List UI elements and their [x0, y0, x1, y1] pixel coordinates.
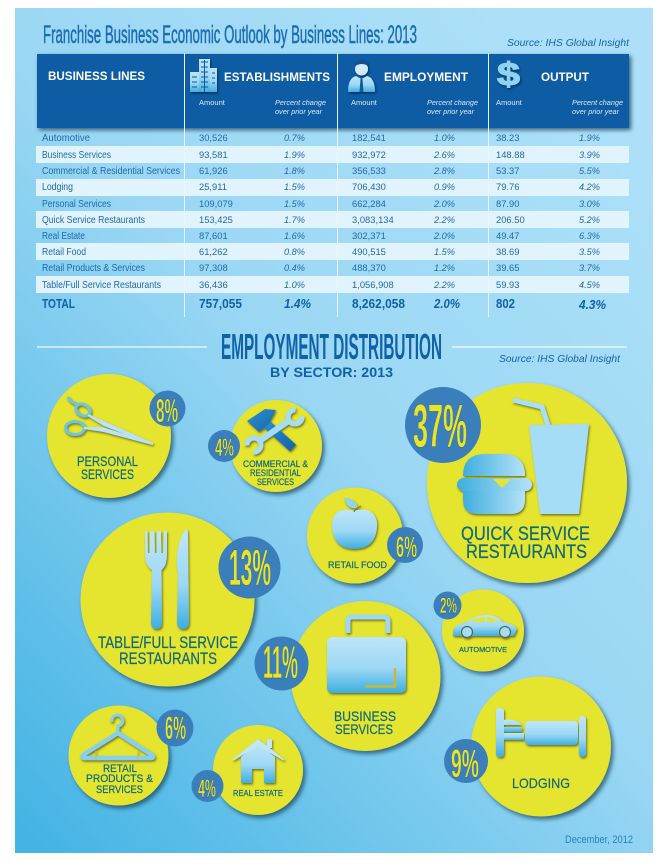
row: automotive: 1.9% — [579, 133, 600, 143]
icon: fork — [145, 531, 167, 629]
bubble: automotive 2% — [434, 590, 524, 672]
row: personal services: Personal Services — [42, 199, 111, 210]
header label: output: OUTPUT — [541, 70, 590, 84]
row: retail products and services: 97,308 — [199, 262, 228, 273]
row: business services: 93,581 — [199, 149, 228, 160]
row: table/full service restaurants: Table/Full Service Restaurants — [42, 280, 161, 291]
row: lodging: 79.76 — [496, 181, 519, 192]
row: real estate: 1.6% — [284, 231, 305, 241]
label: SERVICES — [96, 784, 143, 796]
row: lodging — [42, 181, 600, 193]
bubble: personal services 8% — [47, 374, 186, 498]
row: automotive — [42, 132, 600, 144]
icon: knife — [177, 529, 189, 629]
percent badge: 4% — [215, 434, 234, 462]
row: retail food: 0.8% — [284, 247, 305, 257]
row: table/full service restaurants: 4.5% — [579, 280, 600, 290]
row: retail food: 1.5% — [434, 247, 455, 257]
row: lodging: Lodging — [42, 182, 73, 193]
header sublabels: output: over prior year — [572, 107, 619, 116]
row: business services: 932,972 — [352, 149, 386, 160]
percent badge: 2% — [440, 593, 457, 618]
icon: car — [453, 615, 517, 638]
section subheading: by sector: BY SECTOR: 2013 — [270, 364, 393, 380]
header sublabels: employment — [351, 98, 478, 116]
header sublabels: establishments: Percent change — [275, 98, 326, 107]
row: retail food: 61,262 — [199, 246, 228, 257]
row: automotive: 30,526 — [199, 132, 228, 143]
icon: buildings — [190, 59, 217, 92]
label: RESTAURANTS — [119, 650, 217, 668]
label: RESIDENTIAL — [250, 468, 301, 478]
label: SERVICES — [335, 721, 393, 737]
header sublabels: output — [496, 98, 623, 116]
header label: employment: EMPLOYMENT — [384, 70, 469, 84]
label — [86, 763, 154, 796]
percent badge: 13% — [229, 539, 271, 596]
label: QUICK SERVICE — [461, 523, 590, 545]
row: business services: 1.9% — [284, 150, 305, 160]
percent badge — [254, 636, 308, 690]
row: personal services: 662,284 — [352, 198, 386, 209]
row: table/full service restaurants: 59.93 — [496, 279, 519, 290]
row: retail food: Retail Food — [42, 247, 86, 258]
header label: establishments: ESTABLISHMENTS — [224, 70, 330, 84]
percent badge — [218, 536, 280, 598]
label: RESTAURANTS — [466, 541, 587, 563]
header label: business lines: BUSINESS LINES — [48, 69, 145, 83]
label: TABLE/FULL SERVICE — [98, 634, 238, 652]
bubble: quick service restaurants 37% — [405, 383, 627, 583]
row: business services — [42, 149, 600, 161]
bubble: retail food 6% — [307, 488, 423, 584]
row: commercial and residential services: 1.8% — [284, 166, 305, 176]
row: retail food: 3.5% — [579, 247, 600, 257]
row: business services: 148.88 — [496, 149, 525, 160]
row: personal services: 2.0% — [433, 199, 455, 209]
percent badge: 4% — [198, 775, 216, 803]
row: lodging: 1.5% — [284, 182, 305, 192]
row: retail products and services: 39.65 — [496, 262, 519, 273]
icon: briefcase — [327, 617, 406, 693]
percent badge — [444, 739, 488, 786]
label — [334, 708, 396, 737]
icon: dollar sign: $ — [497, 56, 520, 92]
row: business services: 3.9% — [579, 150, 600, 160]
label: SERVICES — [81, 466, 134, 482]
row: automotive: Automotive — [42, 133, 90, 144]
row: personal services: 1.5% — [284, 199, 305, 209]
source note: distribution: Source: IHS Global Insight — [499, 353, 621, 365]
row: total: 8,262,058 — [352, 297, 405, 311]
header sublabels: output: Percent change — [572, 98, 623, 107]
row: real estate: Real Estate — [42, 231, 85, 242]
row: automotive: 1.0% — [434, 133, 455, 143]
row: quick service restaurants: 3,083,134 — [352, 214, 394, 225]
row: total: TOTAL — [42, 297, 75, 311]
date note: December, 2012 — [565, 834, 633, 846]
row: retail food: 490,515 — [352, 246, 386, 257]
row: total: 757,055 — [199, 297, 242, 311]
row: personal services — [42, 198, 600, 210]
header sublabels: output: Amount — [496, 98, 523, 107]
bubble: table/full service restaurants 13% — [80, 512, 280, 686]
row: real estate: 6.3% — [579, 231, 600, 241]
row: automotive: 38.23 — [496, 132, 519, 143]
row: quick service restaurants: 5.2% — [579, 215, 600, 225]
icon: hammer and wrench — [247, 409, 302, 452]
label — [243, 459, 308, 487]
row: personal services: 3.0% — [579, 199, 600, 209]
percent badge: 6% — [396, 531, 417, 564]
label: LODGING — [512, 775, 570, 791]
icon: bed — [496, 708, 586, 757]
row: total: 2.0% — [433, 297, 460, 311]
percent badge: 37% — [413, 392, 467, 460]
row: total — [42, 297, 606, 312]
row: commercial and residential services: 61,926 — [199, 165, 228, 176]
percent badge: 8% — [156, 392, 178, 429]
bubble: lodging 9% — [444, 676, 611, 816]
bubble: retail products and services 6% — [68, 706, 194, 806]
row: total: 1.4% — [284, 297, 311, 311]
row: table/full service restaurants: 1,056,908 — [352, 279, 394, 290]
row: automotive: 182,541 — [352, 132, 386, 143]
icon: apple — [332, 498, 377, 549]
icon: drink cup — [513, 400, 589, 514]
row: lodging: 706,430 — [352, 181, 386, 192]
row: total: 802 — [496, 297, 515, 311]
row: quick service restaurants: 1.7% — [284, 215, 305, 225]
label — [77, 453, 138, 482]
row: table/full service restaurants: 36,436 — [199, 279, 228, 290]
row: quick service restaurants: 206.50 — [496, 214, 525, 225]
header sublabels: establishments — [199, 98, 326, 116]
row: lodging: 4.2% — [579, 182, 600, 192]
row: commercial and residential services — [42, 165, 600, 177]
table — [36, 53, 629, 317]
row: personal services: 109,079 — [199, 198, 233, 209]
label: REAL ESTATE — [233, 789, 283, 798]
row: commercial and residential services: 356,533 — [352, 165, 386, 176]
row: real estate — [42, 230, 600, 242]
label: RETAIL — [103, 763, 137, 775]
header sublabels: employment: Amount — [351, 98, 378, 107]
source note: table: Source: IHS Global Insight — [507, 37, 630, 49]
bubble: commercial and residential services 4% — [208, 400, 322, 492]
label: PRODUCTS & — [86, 773, 154, 785]
icon: house — [233, 739, 284, 783]
label — [461, 523, 590, 563]
percent badge: 6% — [165, 710, 186, 746]
row: real estate: 49.47 — [496, 230, 519, 241]
icon: scissors — [66, 397, 153, 444]
label: SERVICES — [257, 477, 294, 487]
row: quick service restaurants: 153,425 — [199, 214, 233, 225]
row: commercial and residential services: Commercial & Residential Services — [42, 166, 180, 177]
table header — [37, 54, 629, 128]
row: retail food — [42, 246, 600, 258]
bubble: real estate 4% — [192, 725, 303, 815]
row: retail products and services: 3.7% — [579, 263, 600, 273]
header sublabels: employment: Percent change — [427, 98, 478, 107]
row: quick service restaurants: 2.2% — [433, 215, 455, 225]
label: AUTOMOTIVE — [459, 647, 507, 654]
row: business services: Business Services — [42, 150, 111, 161]
row: business services: 2.6% — [433, 150, 455, 160]
icon: business person — [348, 60, 375, 92]
header sublabels: employment: over prior year — [427, 107, 474, 116]
row: commercial and residential services: 5.5% — [579, 166, 600, 176]
row: commercial and residential services: 53.37 — [496, 165, 519, 176]
row: real estate: 87,601 — [199, 230, 228, 241]
row: retail food: 38.69 — [496, 246, 519, 257]
row: real estate: 302,371 — [352, 230, 386, 241]
row: personal services: 87.90 — [496, 198, 519, 209]
row: total: 4.3% — [578, 298, 606, 312]
bubble: business services 11% — [254, 601, 440, 751]
percent badge: 9% — [451, 742, 479, 786]
icon: hanger — [82, 715, 153, 760]
label: PERSONAL — [77, 453, 138, 469]
row bands — [36, 146, 629, 293]
row: retail products and services: 488,370 — [352, 262, 386, 273]
header sublabels: establishments: over prior year — [275, 107, 322, 116]
row: quick service restaurants — [42, 214, 600, 226]
label: COMMERCIAL & — [243, 459, 308, 469]
percent badge — [405, 387, 481, 463]
row: lodging: 25,911 — [199, 181, 227, 192]
row: table/full service restaurants: 2.2% — [433, 280, 455, 290]
row: table/full service restaurants: 1.0% — [284, 280, 305, 290]
row: table/full service restaurants — [42, 279, 600, 291]
icon: burger — [457, 454, 532, 514]
label: BUSINESS — [334, 708, 396, 724]
percent badge: 11% — [263, 636, 298, 688]
label — [98, 634, 238, 668]
row: commercial and residential services: 2.8% — [433, 166, 455, 176]
row: quick service restaurants: Quick Service Restaurants — [42, 215, 145, 226]
row: retail products and services — [42, 262, 600, 274]
row: retail products and services: Retail Products & Services — [42, 263, 145, 274]
row: automotive: 0.7% — [284, 133, 305, 143]
row: real estate: 2.0% — [433, 231, 455, 241]
row: retail products and services: 0.4% — [284, 263, 305, 273]
row: retail products and services: 1.2% — [434, 263, 455, 273]
label: RETAIL FOOD — [328, 560, 387, 571]
row: lodging: 0.9% — [434, 182, 455, 192]
header sublabels: establishments: Amount — [199, 98, 226, 107]
